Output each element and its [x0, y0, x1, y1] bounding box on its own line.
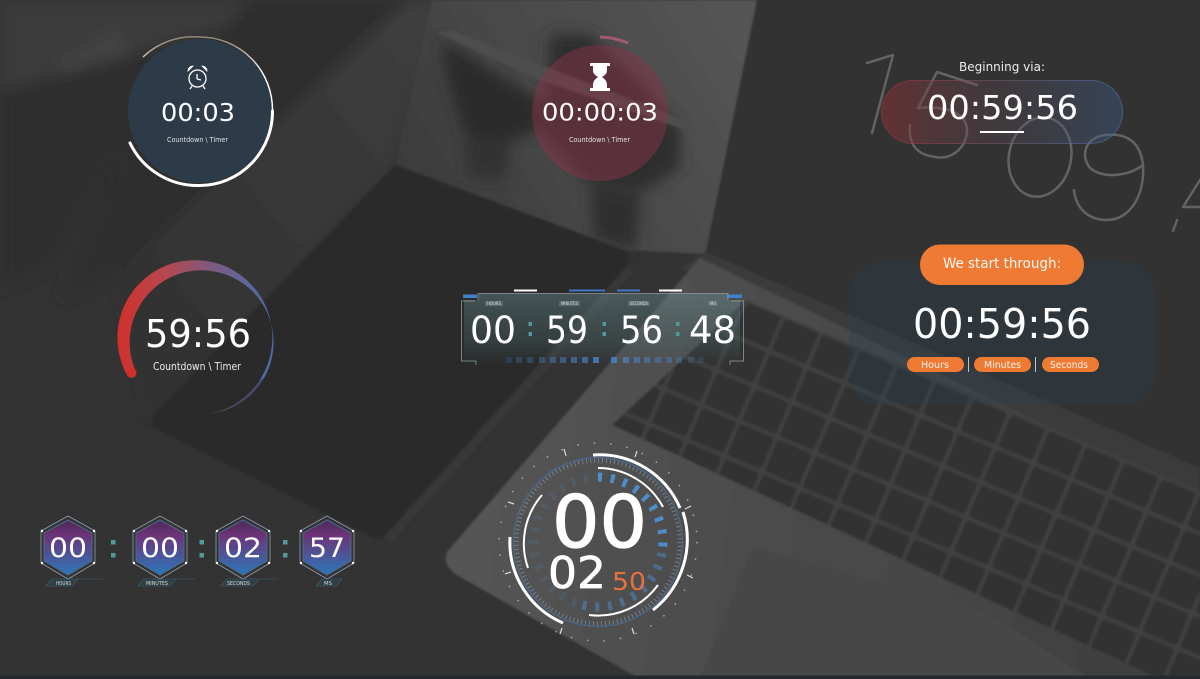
hexagon seconds: SECONDS	[227, 581, 250, 587]
panel background	[849, 262, 1155, 405]
hexagon minutes	[133, 516, 195, 587]
frame brackets	[462, 293, 744, 365]
time value: 00:59:56	[927, 88, 1078, 127]
pill	[882, 80, 1122, 144]
handwritten digits behind pill timer	[867, 55, 1200, 231]
unit labels: MINUTES	[561, 301, 578, 307]
unit pills: Seconds	[1050, 360, 1088, 371]
milliseconds: 50	[612, 567, 646, 596]
timer: gradient arc gauge	[117, 260, 274, 414]
timer: hexagon countdown	[41, 516, 354, 587]
timer: circular rose with hourglass	[532, 37, 668, 181]
hexagon hours: HOURS	[56, 581, 71, 587]
hexagon minutes: MINUTES	[146, 581, 168, 587]
unit labels	[485, 301, 718, 307]
blue ring line	[514, 458, 682, 626]
unit pills: Hours	[921, 360, 949, 371]
heading: Beginning via:	[959, 60, 1045, 74]
timer: pill with gradient	[882, 60, 1122, 144]
blue ring ticks	[516, 460, 680, 624]
white arcs	[510, 455, 687, 623]
timer: radial dial	[499, 443, 697, 641]
digits: 59	[546, 309, 588, 352]
colon 1	[111, 540, 116, 558]
hexagon seconds	[216, 516, 278, 587]
digits: 56	[620, 309, 663, 352]
sunglasses temple arm	[438, 30, 690, 130]
time value: 00:03	[161, 98, 235, 127]
unit labels: HOURS	[487, 301, 501, 307]
seconds: 02	[548, 548, 606, 599]
colons	[528, 322, 680, 336]
caption: Countdown \ Timer	[569, 136, 630, 144]
unit labels: SECONDS	[630, 301, 648, 307]
icon: hourglass	[590, 63, 610, 91]
dim wedges	[533, 477, 597, 603]
digits: 00	[470, 309, 516, 352]
orange heading pill	[920, 244, 1084, 285]
timer: circular blue with alarm clock	[128, 37, 273, 186]
time value: 00:59:56	[913, 300, 1091, 348]
hexagon ms: 57	[309, 533, 345, 564]
icon: alarm clock	[188, 66, 207, 89]
gauge arc	[117, 260, 274, 414]
digits	[470, 309, 736, 352]
medium wedges	[576, 553, 662, 607]
progress squares	[506, 357, 704, 363]
outer tick ring	[499, 443, 697, 641]
hexagon seconds: 02	[224, 533, 262, 564]
small top arc	[600, 37, 628, 43]
hexagon ms	[300, 516, 354, 587]
ring thin arc	[143, 37, 273, 111]
hexagon hours	[41, 516, 103, 587]
unit pills	[907, 357, 1099, 372]
timer: digital HUD panel	[462, 290, 744, 365]
timer: orange panel	[849, 244, 1155, 405]
bright wedges	[598, 477, 663, 553]
minutes: 00	[552, 480, 647, 564]
unit labels: MS	[710, 301, 716, 307]
hexagon hours: 00	[49, 533, 87, 564]
unit pills: Minutes	[984, 360, 1021, 371]
underline	[980, 131, 1024, 133]
colon 3	[283, 540, 288, 558]
inner white arcs	[524, 468, 663, 616]
heading text: We start through:	[943, 256, 1061, 272]
hexagon ms: MS	[324, 581, 332, 587]
top accent bars	[463, 290, 742, 298]
caption: Countdown \ Timer	[167, 136, 228, 144]
ring progress arc	[130, 111, 273, 186]
time value: 00:00:03	[542, 98, 658, 126]
panel background	[464, 294, 740, 364]
time value: 59:56	[145, 312, 251, 356]
hexagon minutes: 00	[141, 533, 179, 564]
caption: Countdown \ Timer	[153, 361, 242, 373]
colon 2	[200, 540, 204, 558]
digits: 48	[689, 309, 736, 352]
long outer marks	[505, 449, 693, 634]
